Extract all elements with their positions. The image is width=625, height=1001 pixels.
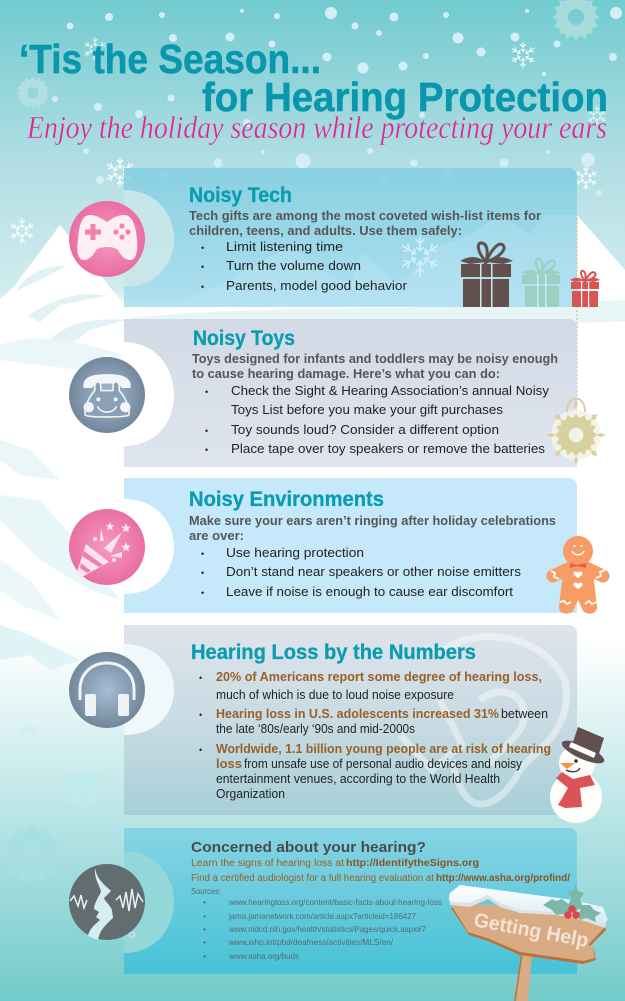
bullet list: • xyxy=(201,282,204,292)
bullet list: Place tape over toy speakers or remove the batteries xyxy=(231,441,546,456)
halo xyxy=(124,499,174,594)
stats list: entertainment venues, according to the World Health xyxy=(216,772,500,786)
sources: www.who.int/pbd/deafness/activities/MLS/en/ xyxy=(228,937,394,947)
intro text: to cause hearing damage. Here’s what you can do: xyxy=(192,367,500,381)
bullet list: Limit listening time xyxy=(226,239,343,254)
sources: jama.jamanetwork.com/article.aspx?articleid=186427 xyxy=(228,911,416,921)
stats list: Hearing loss in U.S. adolescents increased 31% xyxy=(216,707,499,721)
icon: snowflake xyxy=(400,235,440,277)
icon: smiling phone xyxy=(69,357,145,433)
small gift xyxy=(570,271,600,307)
heading: Hearing Loss by the Numbers xyxy=(191,641,476,664)
links: Learn the signs of hearing loss at xyxy=(191,858,344,869)
bullet list: Toys List before you make your gift purchases xyxy=(231,402,504,417)
stats list: loss xyxy=(216,757,242,771)
sources xyxy=(191,886,442,961)
links: http://IdentifytheSigns.org xyxy=(346,858,479,869)
heading: Noisy Tech xyxy=(189,184,292,207)
snow dots xyxy=(52,7,622,196)
title: for Hearing Protection xyxy=(202,74,608,120)
bullet list: • xyxy=(201,549,204,559)
links: Find a certified audiologist for a full hearing evaluation at xyxy=(191,873,434,884)
halo xyxy=(124,644,174,735)
panel: noisy tech xyxy=(69,168,577,307)
bullet list: Check the Sight & Hearing Association’s annual Noisy xyxy=(231,383,550,398)
icon: ornament xyxy=(546,398,606,465)
sources: • xyxy=(203,951,206,961)
bullet list: • xyxy=(205,426,208,436)
sources: www.asha.org/buds xyxy=(228,951,299,961)
intro text xyxy=(189,209,541,238)
heading: Concerned about your hearing? xyxy=(191,839,426,856)
icon: profile logo xyxy=(69,864,145,940)
sources: www.nidcd.nih.gov/health/statistics/Pages/quick.aspx#7 xyxy=(228,924,426,934)
intro text: Toys designed for infants and toddlers may be noisy enough xyxy=(192,352,558,366)
stats list: between xyxy=(501,707,548,721)
links: http://www.asha.org/profind/ xyxy=(436,873,570,884)
stats list xyxy=(199,670,551,801)
bullet list: Use hearing protection xyxy=(226,545,364,560)
icon: party popper xyxy=(69,509,145,585)
stats list: the late ‘80s/early ‘90s and mid-2000s xyxy=(216,722,415,736)
heading: Noisy Toys xyxy=(193,327,295,350)
stats list: Organization xyxy=(216,787,285,801)
bullet list: • xyxy=(205,445,208,455)
bullet list xyxy=(201,545,522,599)
title xyxy=(19,36,608,120)
bullet list: • xyxy=(201,262,204,272)
intro text xyxy=(189,514,556,543)
panel: noisy toys xyxy=(69,319,577,467)
intro text xyxy=(192,352,558,381)
bullet list: Turn the volume down xyxy=(226,258,361,273)
sign: getting help: Getting Help xyxy=(472,909,590,952)
sources: • xyxy=(203,937,206,947)
stats list: 20% of Americans report some degree of hearing loss, xyxy=(216,670,542,684)
halo xyxy=(124,851,174,953)
stats list: from unsafe use of personal audio devices and noisy xyxy=(244,757,523,771)
sources: www.hearingloss.org/content/basic-facts-about-hearing-loss xyxy=(228,897,442,907)
bullet list: Toy sounds loud? Consider a different option xyxy=(231,422,499,437)
stats list: much of which is due to loud noise exposure xyxy=(216,688,454,702)
stats list: Worldwide, 1.1 billion young people are at risk of hearing xyxy=(216,742,551,756)
intro text: are over: xyxy=(189,529,244,543)
bullet list: • xyxy=(201,568,204,578)
sources: • xyxy=(203,897,206,907)
links xyxy=(191,858,570,884)
heading: Noisy Environments xyxy=(189,488,384,511)
icon: snowman xyxy=(550,727,607,823)
icon: gifts xyxy=(460,243,600,307)
bullet list xyxy=(201,239,408,293)
bullet list: Leave if noise is enough to cause ear discomfort xyxy=(226,584,513,599)
halo xyxy=(124,190,174,287)
bullet list: Don’t stand near speakers or other noise emitters xyxy=(226,564,522,579)
title: ‘Tis the Season... xyxy=(19,36,321,82)
bullet list xyxy=(205,383,550,456)
panel: getting help xyxy=(69,828,577,974)
panel: noisy environments xyxy=(69,478,577,613)
stats list: • xyxy=(199,673,202,683)
intro text: children, teens, and adults. Use them safely: xyxy=(189,224,462,238)
bullet list: • xyxy=(201,243,204,253)
bullet list: • xyxy=(201,588,204,598)
panel: hearing loss by the numbers xyxy=(69,625,577,815)
dotted string xyxy=(576,218,578,398)
icon: headphones xyxy=(69,652,145,728)
icon: game controller xyxy=(69,201,145,277)
large gift xyxy=(460,243,513,307)
stats list: • xyxy=(199,745,202,755)
intro text: Make sure your ears aren’t ringing after holiday celebrations xyxy=(189,514,556,528)
bullet list: Parents, model good behavior xyxy=(226,278,408,293)
sources: • xyxy=(203,911,206,921)
holly xyxy=(543,883,601,922)
snowy mountains xyxy=(0,215,625,670)
stats list: • xyxy=(199,710,202,720)
halo xyxy=(124,342,174,446)
sign: getting help xyxy=(449,883,608,1001)
bullet list: • xyxy=(205,387,208,397)
intro text: Tech gifts are among the most coveted wish-list items for xyxy=(189,209,541,223)
medium gift xyxy=(521,259,561,307)
icon: gingerbread man xyxy=(551,536,605,614)
sources: Sources: xyxy=(191,886,221,896)
sources: • xyxy=(203,924,206,934)
icon: ear watermark xyxy=(400,637,567,804)
